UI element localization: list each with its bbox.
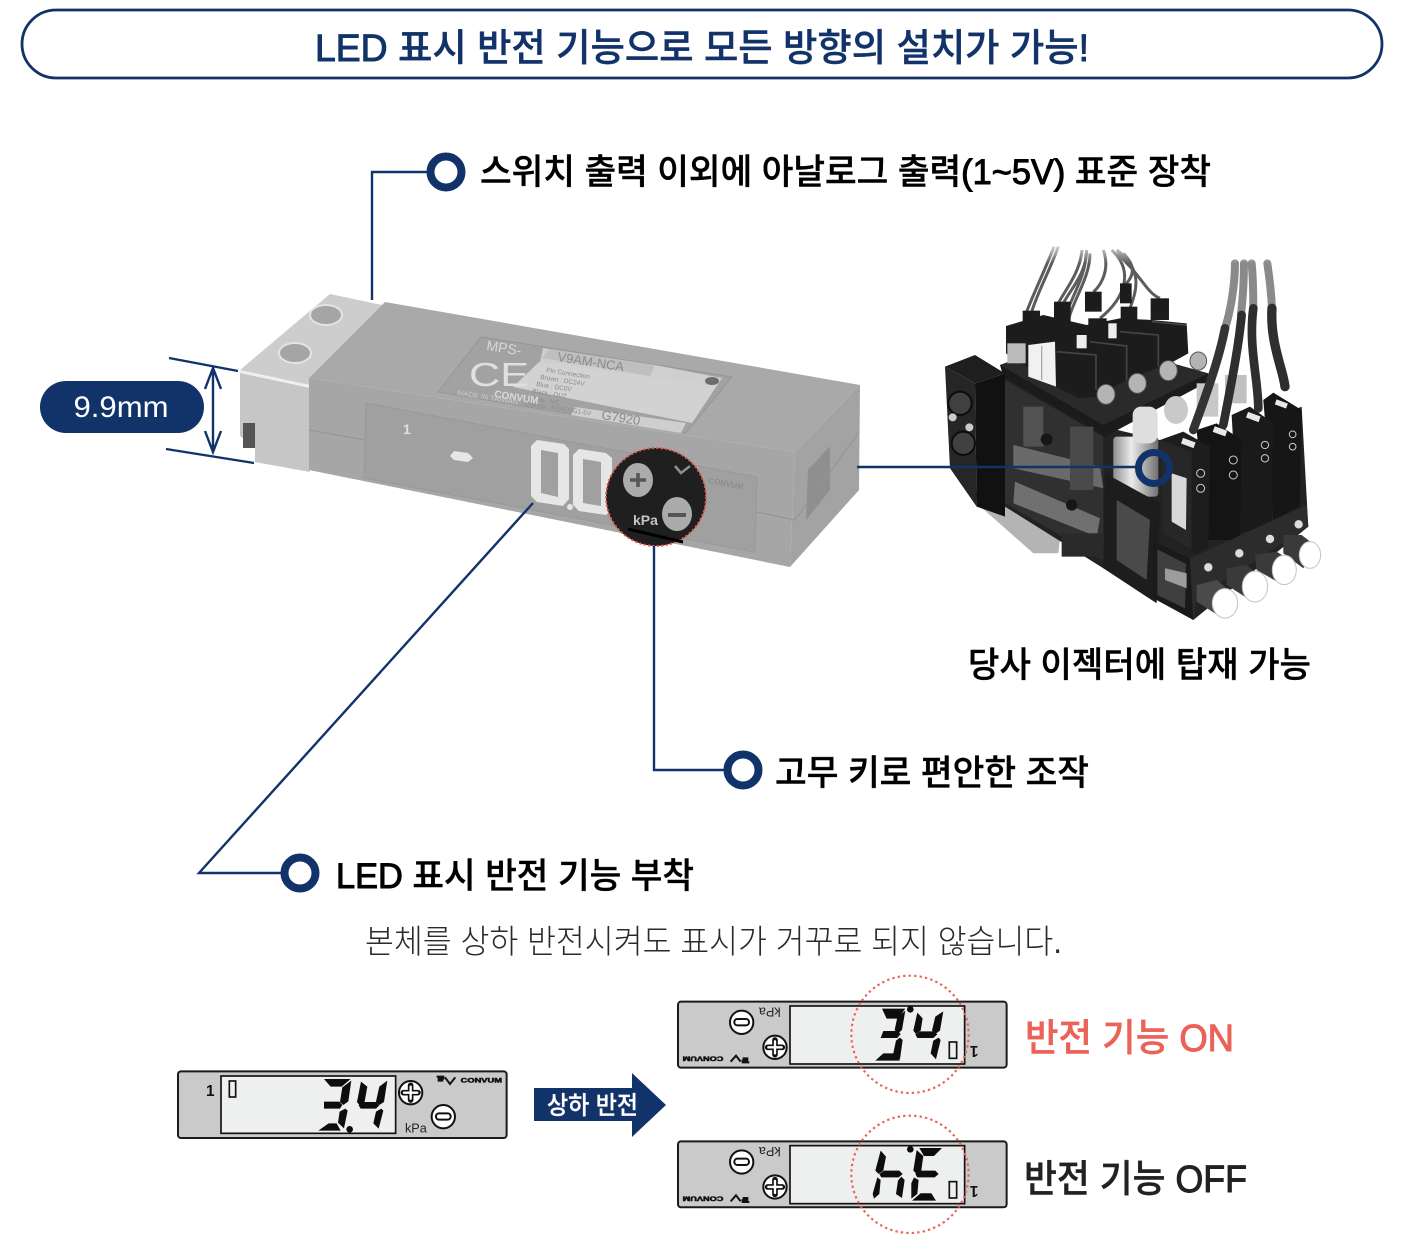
- product photo: pressure switch: CE: [469, 356, 529, 393]
- panel: inverted display, function off: CONVUM: [682, 1194, 723, 1201]
- dimension: 9.9mm: 9.9mm: [74, 391, 168, 424]
- arrow: invert: [534, 1073, 666, 1137]
- mounting bracket: [977, 503, 1060, 553]
- front cables: [1193, 263, 1285, 430]
- panel: normal display: [178, 1071, 507, 1138]
- panel: inverted display, function on: kPa: [758, 1004, 781, 1018]
- product photo: pressure switch: White : NC: [528, 395, 560, 407]
- product photo: pressure switch: MADE IN TAIWAN: [457, 388, 519, 407]
- sensor bodies: [1263, 393, 1302, 520]
- callout: rubber keys: 고무 키로 편안한 조작: [775, 754, 1089, 793]
- panel: inverted display, function off: 1: [969, 1182, 978, 1199]
- callout: ejector mounting: [857, 452, 1311, 685]
- product photo: ejector manifold: [945, 240, 1321, 620]
- left block: [975, 373, 1005, 517]
- bracket: [240, 294, 382, 385]
- product photo: pressure switch: [240, 294, 860, 567]
- knobs: [1097, 352, 1207, 404]
- callout: rubber keys: [654, 546, 1089, 793]
- description text: 본체를 상하 반전시켜도 표시가 거꾸로 되지 않습니다.: [365, 923, 1062, 960]
- callout: LED display inversion: LED 표시 반전 기능 부착: [336, 857, 694, 896]
- front tubes: [1005, 380, 1103, 560]
- rear wires: [1027, 247, 1160, 328]
- panel: normal display: 1: [206, 1083, 215, 1100]
- solenoids: [1006, 283, 1188, 398]
- product photo: pressure switch: Pin Connection: [546, 367, 591, 381]
- product photo: pressure switch: CONVUM: [494, 389, 539, 407]
- title banner: [22, 10, 1382, 78]
- panel: inverted display, function off: [678, 1116, 1007, 1233]
- callout: analog output: [372, 153, 1211, 300]
- title banner: LED 표시 반전 기능으로 모든 방향의 설치가 가능!: [315, 28, 1089, 70]
- product photo: pressure switch: Orange : ANALOG1-5V: [524, 400, 592, 418]
- product photo: pressure switch: CONVUM: [708, 476, 745, 491]
- panel: inverted display, function on: [678, 976, 1007, 1093]
- display window: [364, 403, 757, 552]
- product photo: pressure switch: MPS-: [486, 337, 523, 358]
- callout: ejector mounting: 당사 이젝터에 탑재 가능: [968, 646, 1311, 685]
- panel: normal display: CONVUM: [461, 1078, 503, 1085]
- panel: inverted display, function on: 1: [969, 1042, 978, 1059]
- product photo: pressure switch: Blue : DC0V: [536, 381, 573, 394]
- label: function off: 반전 기능 OFF: [1024, 1159, 1247, 1201]
- dimension: 9.9mm: [40, 358, 254, 463]
- product photo: pressure switch: Brown : DC24V: [540, 374, 586, 388]
- product photo: pressure switch: V9AM-NCA: [557, 349, 626, 375]
- keypad zoom circle: [606, 448, 706, 546]
- display digits: 1: [403, 421, 411, 437]
- filter holder: [1103, 473, 1160, 603]
- callout: analog output: 스위치 출력 이외에 아날로그 출력(1~5V) 표준 장착: [480, 153, 1211, 192]
- callout: LED display inversion: [199, 503, 694, 896]
- label: function on: 반전 기능 ON: [1025, 1018, 1234, 1060]
- panel: inverted display, function on: CONVUM: [682, 1055, 723, 1062]
- arrow: invert: 상하 반전: [547, 1092, 638, 1120]
- product photo: pressure switch: G7920: [601, 407, 641, 428]
- body: [309, 302, 860, 452]
- product photo: pressure switch: kPa: [633, 512, 658, 528]
- panel: inverted display, function off: kPa: [758, 1144, 781, 1158]
- product photo: pressure switch: Black : OUT: [532, 388, 567, 400]
- label plate: [438, 337, 732, 433]
- bottom base: [1153, 542, 1193, 620]
- top plate: [1000, 337, 1208, 437]
- push fittings: [1197, 535, 1321, 618]
- silver filter: [1113, 437, 1158, 497]
- panel: normal display: kPa: [405, 1122, 428, 1136]
- dark mass: [1005, 373, 1308, 620]
